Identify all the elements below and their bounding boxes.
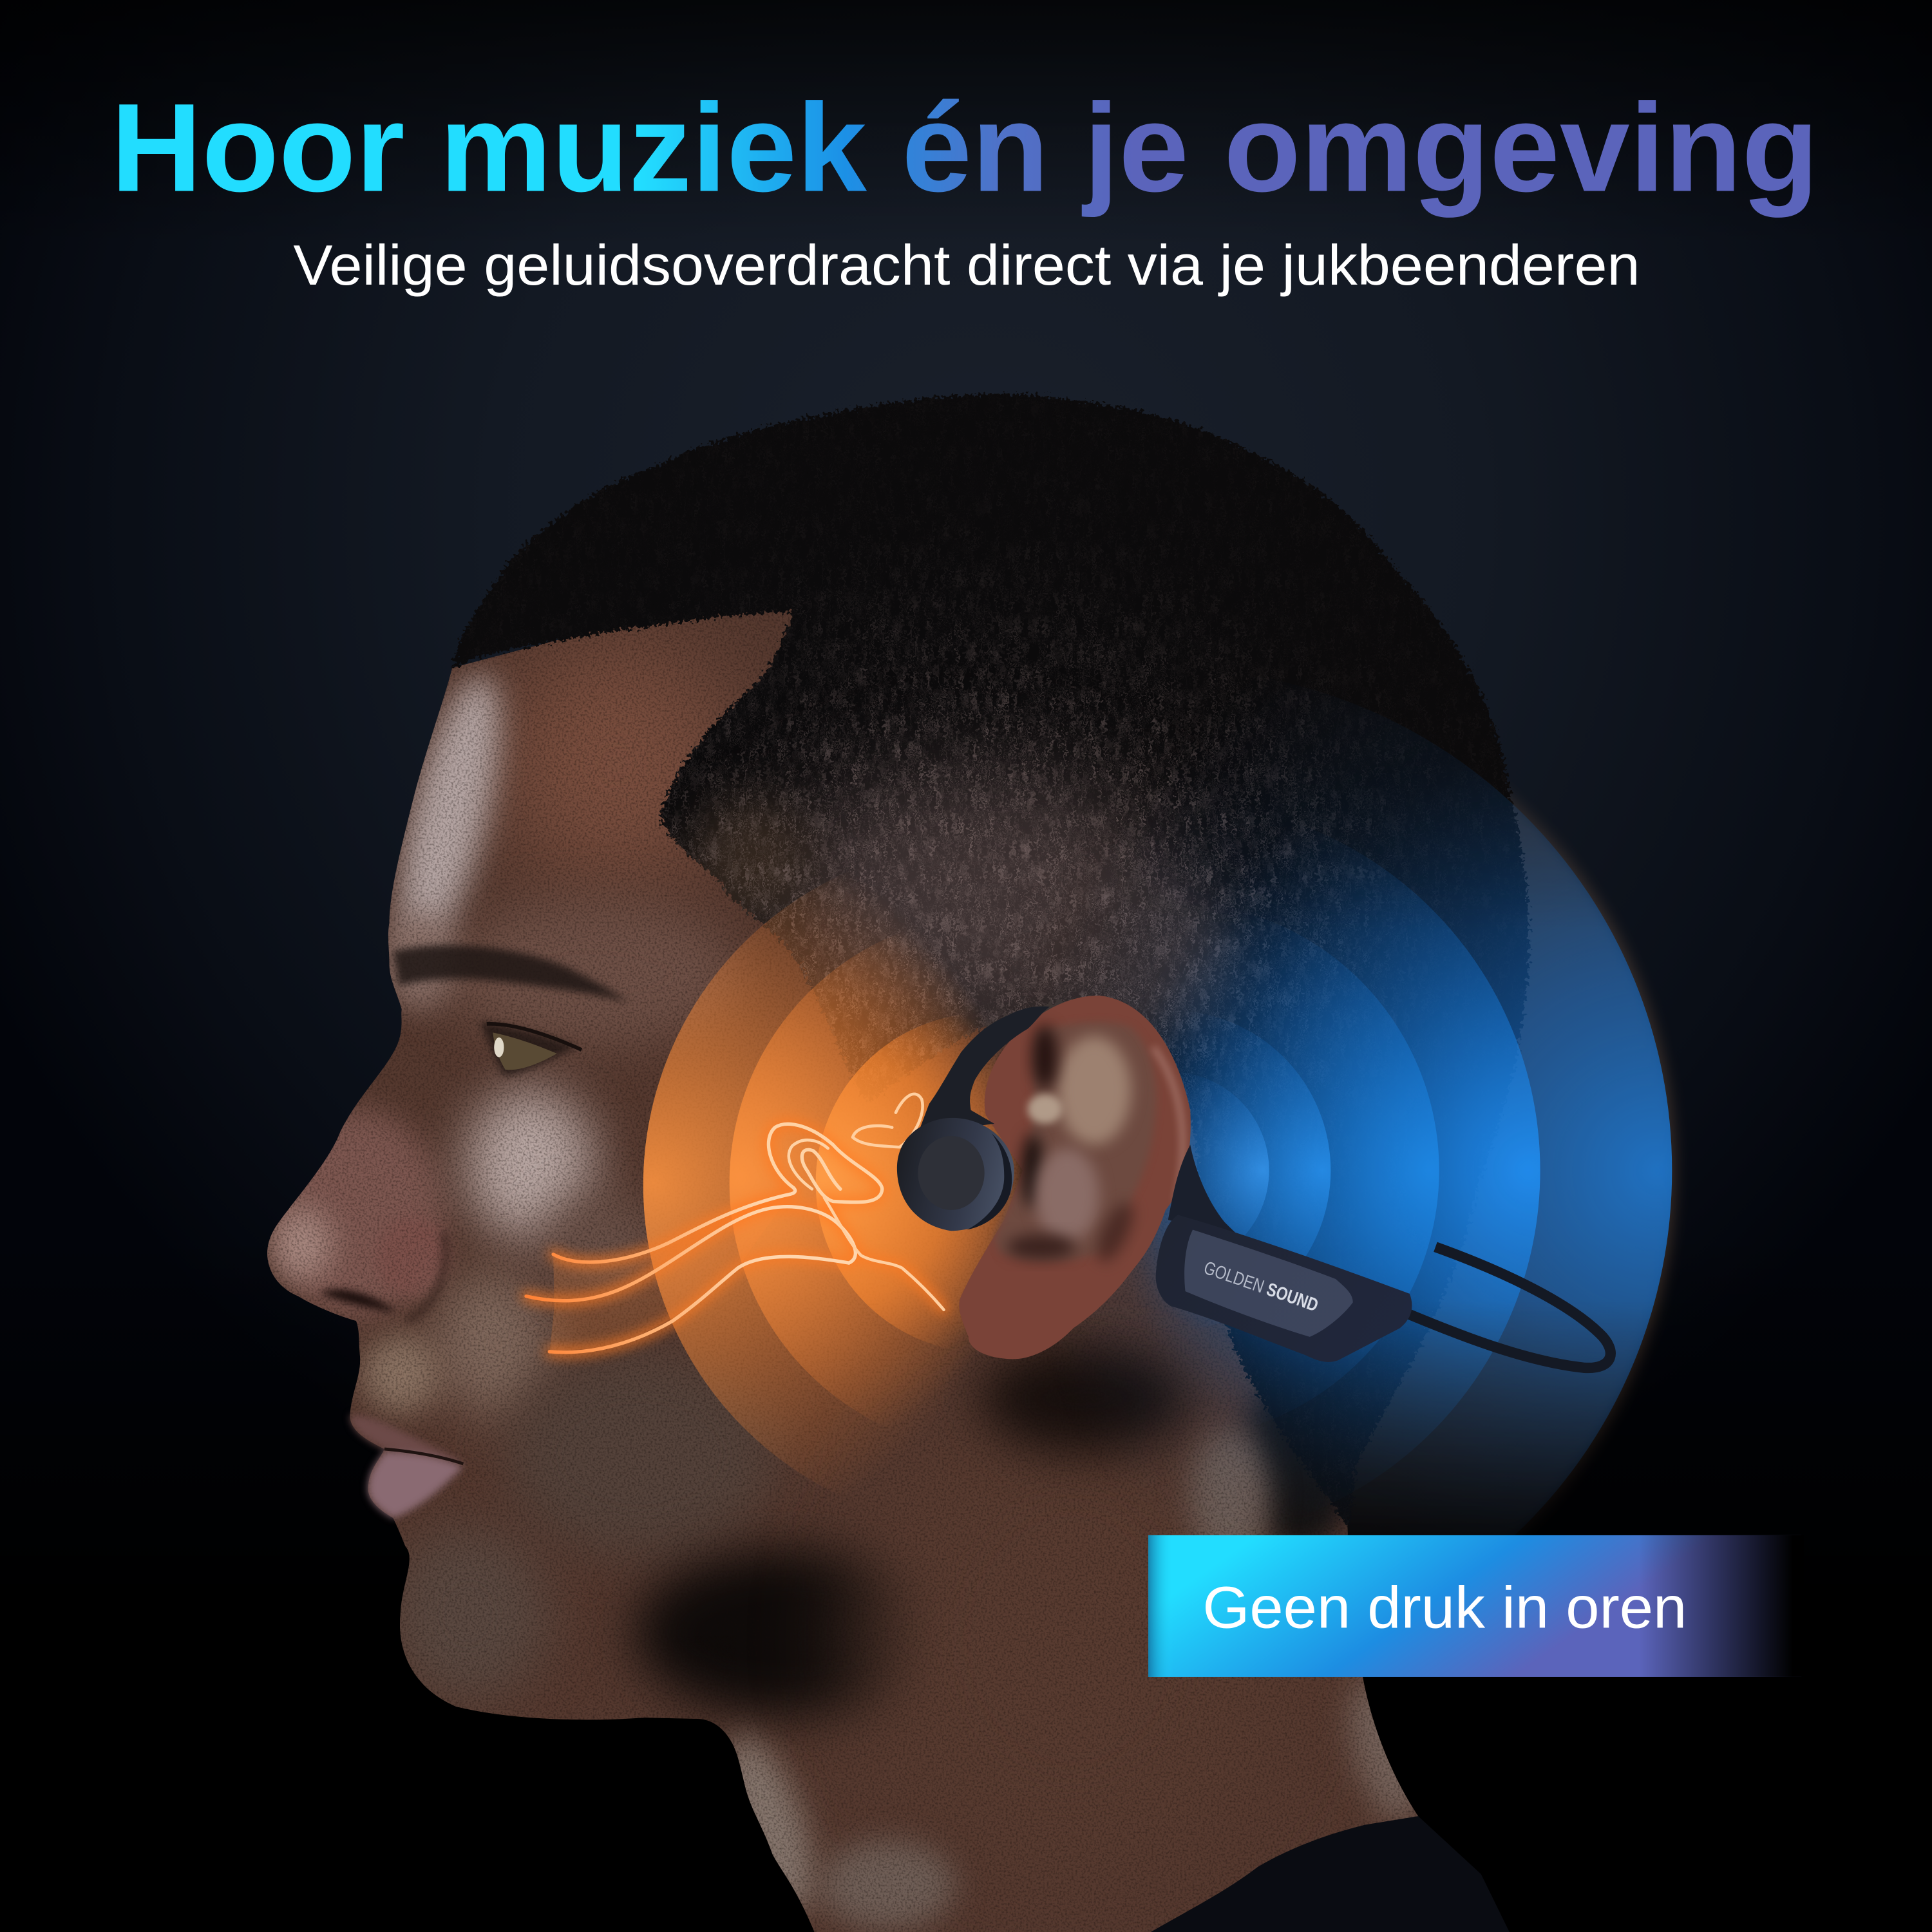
bone conduction lines <box>526 1094 944 1352</box>
headphones <box>897 1007 1611 1368</box>
rear link <box>1168 1144 1244 1240</box>
ear <box>959 996 1191 1359</box>
subtitle: Veilige geluidsoverdracht direct via je jukbeenderen <box>293 233 1640 297</box>
eyebrow <box>393 945 629 1001</box>
eye <box>479 1021 582 1075</box>
lips <box>350 1416 463 1518</box>
hook over ear <box>918 1007 1050 1133</box>
orange sound waves <box>643 843 1328 1528</box>
nose wing crease <box>406 1232 446 1321</box>
black shirt <box>1151 1816 1510 1932</box>
hair <box>419 370 1553 1553</box>
man in profile <box>247 370 1553 1932</box>
title: Hoor muziek én je omgeving <box>111 78 1819 218</box>
skin <box>267 609 1419 1932</box>
brand label: GOLDEN SOUND <box>1201 1258 1321 1316</box>
neckband <box>1407 1247 1611 1368</box>
halo behind blue waves <box>984 790 1682 1535</box>
callout badge <box>1148 1535 1804 1677</box>
battery housing <box>1156 1215 1412 1362</box>
blue sound waves <box>669 669 1672 1672</box>
badge label: Geen druk in oren <box>1202 1575 1687 1640</box>
nostril <box>319 1290 397 1312</box>
transducer pod <box>897 1118 1014 1231</box>
